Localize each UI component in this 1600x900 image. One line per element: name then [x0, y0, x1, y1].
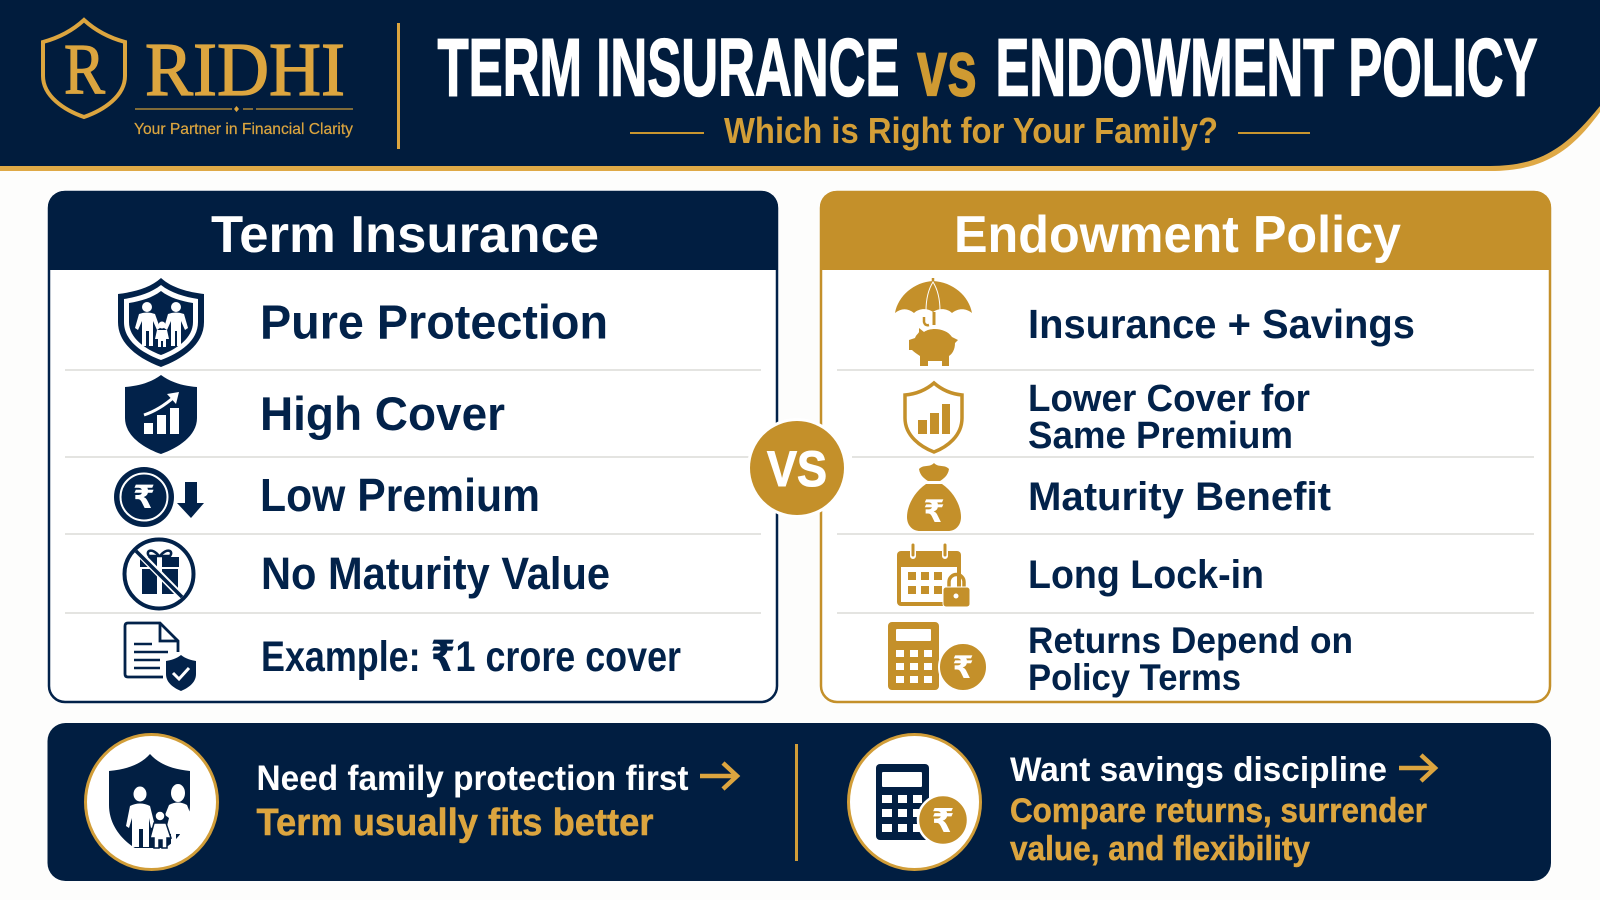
panel: endowment policy: [820, 191, 1551, 702]
label: lower cover: [1028, 378, 1310, 457]
subtitle: Which is Right for Your Family?: [724, 110, 1218, 151]
header banner: [0, 0, 1600, 171]
label: returns depend: Policy Terms: [1028, 657, 1241, 698]
label: lower cover: Same Premium: [1028, 415, 1293, 457]
label: high cover: High Cover: [260, 387, 505, 440]
icon: logo shield: R: [64, 29, 105, 109]
vs badge: [747, 418, 847, 518]
icon: document shield: [125, 623, 196, 691]
icon: rupee premium down: [114, 467, 204, 527]
heading: endowment policy: Endowment Policy: [954, 206, 1401, 264]
logo: [43, 20, 353, 138]
callout: endowment: [1010, 751, 1435, 868]
label: low premium: Low Premium: [260, 469, 540, 521]
vs badge: VS: [767, 441, 827, 497]
callout: endowment: Want savings discipline: [1010, 751, 1387, 789]
label: no maturity value: No Maturity Value: [261, 548, 610, 599]
brand name: RIDHI: [145, 28, 345, 112]
callout: term: [256, 759, 737, 844]
label: lower cover: Lower Cover for: [1028, 378, 1310, 420]
label: maturity benefit: Maturity Benefit: [1028, 475, 1331, 519]
icon: logo shield: [43, 20, 125, 117]
label: returns depend: [1028, 620, 1353, 698]
icon: growth shield: [125, 375, 197, 454]
icon: no gift: [124, 540, 194, 608]
callout: endowment: Compare returns, surrender: [1010, 792, 1427, 830]
arrow: [1399, 755, 1435, 781]
icon: calendar lock: [897, 544, 970, 607]
callout: term: Term usually fits better: [256, 802, 654, 844]
icon: calculator rupee: [888, 622, 987, 691]
label: returns depend: Returns Depend on: [1028, 620, 1353, 661]
bottom banner: [48, 723, 1551, 881]
title: vs: [917, 24, 977, 112]
title: TERM INSURANCE: [438, 22, 900, 114]
icon: umbrella piggy bank: [895, 278, 972, 366]
icon: calculator rupee: ₹: [952, 650, 974, 686]
arrow: [700, 763, 737, 789]
logo divider: [135, 106, 353, 112]
label: insurance plus savings: Insurance + Savings: [1028, 301, 1415, 347]
header divider: [397, 23, 400, 149]
tagline: Your Partner in Financial Clarity: [134, 121, 353, 138]
callout: term: Need family protection first: [256, 759, 689, 798]
heading: term insurance: Term Insurance: [211, 206, 599, 264]
icon: outline shield bars: [905, 383, 962, 452]
icon: rupee premium down: ₹: [133, 478, 155, 516]
icon: calculator badge: ₹: [932, 801, 954, 840]
icon: calculator badge: [848, 734, 980, 870]
label: long lock-in: Long Lock-in: [1028, 553, 1264, 597]
icon: family shield badge: [86, 734, 218, 870]
icon: money bag: [907, 463, 961, 531]
icon: family shield: [118, 278, 204, 367]
label: pure protection: Pure Protection: [260, 296, 608, 350]
callout: endowment: value, and flexibility: [1010, 830, 1310, 868]
panel: term insurance: [48, 191, 778, 702]
icon: money bag: ₹: [923, 494, 945, 530]
title: [438, 22, 1538, 114]
label: example: Example: ₹1 crore cover: [261, 633, 681, 681]
